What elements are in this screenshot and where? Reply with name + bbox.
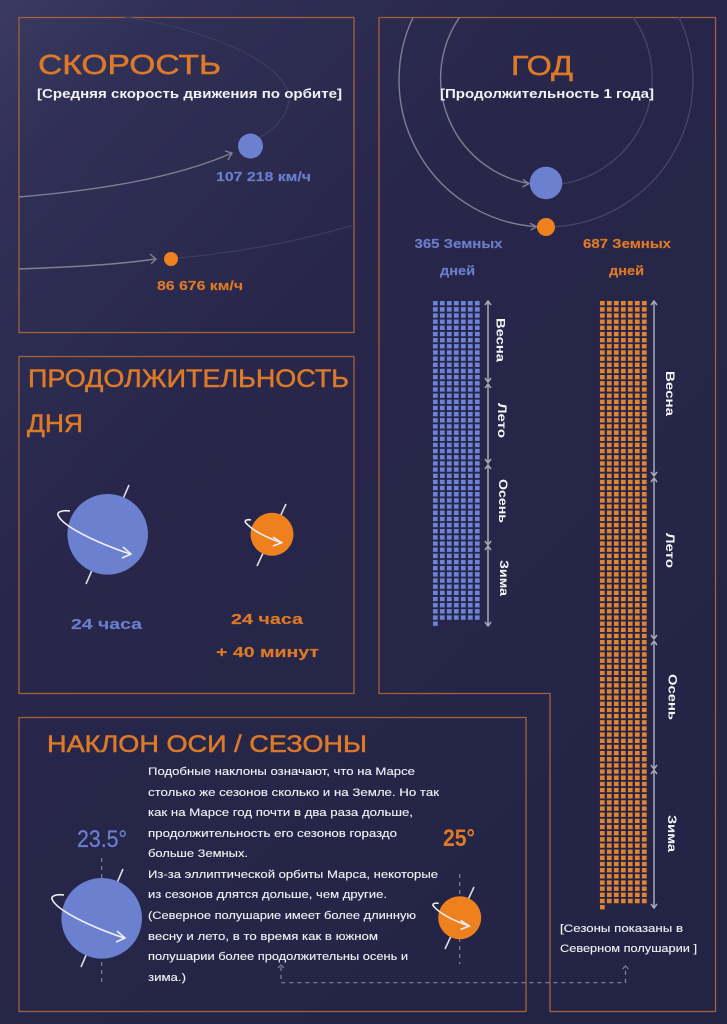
mars season arrows xyxy=(651,301,657,908)
text block: explanation: (Северное полушарие имеет более длинную xyxy=(148,910,416,922)
arrow: dashed link between text and note xyxy=(278,965,628,983)
mars season labels: Зима xyxy=(665,815,679,852)
mars year label xyxy=(583,236,672,278)
heading: year: ГОД xyxy=(511,50,573,81)
planet: mars xyxy=(537,218,555,236)
heading: speed: СКОРОСТЬ xyxy=(38,49,221,80)
text block: explanation xyxy=(148,766,439,984)
text block: explanation: Подобные наклоны означают, что на Марсе xyxy=(148,766,415,778)
icon: earth tilt xyxy=(52,858,142,982)
earth season labels: Весна xyxy=(494,318,508,362)
earth season arrows xyxy=(485,301,491,626)
mars year label: дней xyxy=(609,263,644,278)
text block: explanation: полушарии более продолжительны осень и xyxy=(148,951,408,963)
planet: earth xyxy=(238,134,263,158)
text block: explanation: продолжительность его сезонов гораздо xyxy=(148,828,397,840)
earth year label: дней xyxy=(440,263,475,278)
icon: earth rotation xyxy=(58,485,148,584)
mars day length: 24 часа xyxy=(231,611,304,628)
panel: year xyxy=(379,17,716,1012)
note: hemisphere xyxy=(560,923,697,955)
earth year label: 365 Земных xyxy=(414,236,503,251)
earth season labels: Осень xyxy=(496,479,510,523)
text block: explanation: из сезонов длятся дольше, чем другие. xyxy=(148,889,387,901)
note: hemisphere: [Сезоны показаны в xyxy=(560,923,683,935)
mars tilt value: 25° xyxy=(443,825,475,852)
earth season labels: Лето xyxy=(495,403,509,438)
heading: axis tilt: НАКЛОН ОСИ / СЕЗОНЫ xyxy=(47,731,367,758)
text block: explanation: весну и лето, в то время как в южном xyxy=(148,931,378,943)
heading line 2: ДНЯ xyxy=(27,410,83,438)
earth season labels: Зима xyxy=(497,560,511,596)
heading: day length: ПРОДОЛЖИТЕЛЬНОСТЬ xyxy=(28,365,349,393)
earth tilt value: 23.5° xyxy=(77,826,127,853)
panel: speed xyxy=(19,17,354,332)
earth year label xyxy=(414,236,503,278)
icon: mars tilt xyxy=(433,874,481,964)
mars day length line 2: + 40 минут xyxy=(216,644,319,661)
subtitle: speed: [Средняя скорость движения по орбите] xyxy=(37,87,342,101)
panel: day length xyxy=(19,356,354,694)
mars speed value: 86 676 км/ч xyxy=(157,278,243,293)
planet: earth xyxy=(530,167,562,199)
icon: mars rotation xyxy=(245,504,294,566)
text block: explanation: столько же сезонов сколько и на Земле. Но так xyxy=(148,787,439,799)
text block: explanation: больше Земных. xyxy=(148,848,248,860)
text block: explanation: Из-за эллиптической орбиты Марса, некоторые xyxy=(148,869,438,881)
mars year label: 687 Земных xyxy=(583,236,672,251)
mars season labels xyxy=(663,371,680,852)
subtitle: year: [Продолжительность 1 года] xyxy=(440,87,654,101)
mars season labels: Лето xyxy=(663,533,677,568)
chart: mars days grid xyxy=(600,301,644,909)
chart: earth days grid xyxy=(433,301,477,626)
mars season labels: Осень xyxy=(666,674,680,720)
earth season labels xyxy=(494,318,511,596)
earth speed value: 107 218 км/ч xyxy=(216,169,311,184)
text block: explanation: зима.) xyxy=(148,972,186,984)
orbits xyxy=(399,17,693,230)
panel: axis tilt xyxy=(19,718,526,1012)
planet: mars xyxy=(164,252,178,266)
earth orbit trail xyxy=(19,17,354,269)
mars season labels: Весна xyxy=(663,371,677,416)
note: hemisphere: Северном полушарии ] xyxy=(560,943,697,955)
earth day length: 24 часа xyxy=(71,616,143,633)
text block: explanation: как на Марсе год почти в два раза дольше, xyxy=(148,807,413,819)
